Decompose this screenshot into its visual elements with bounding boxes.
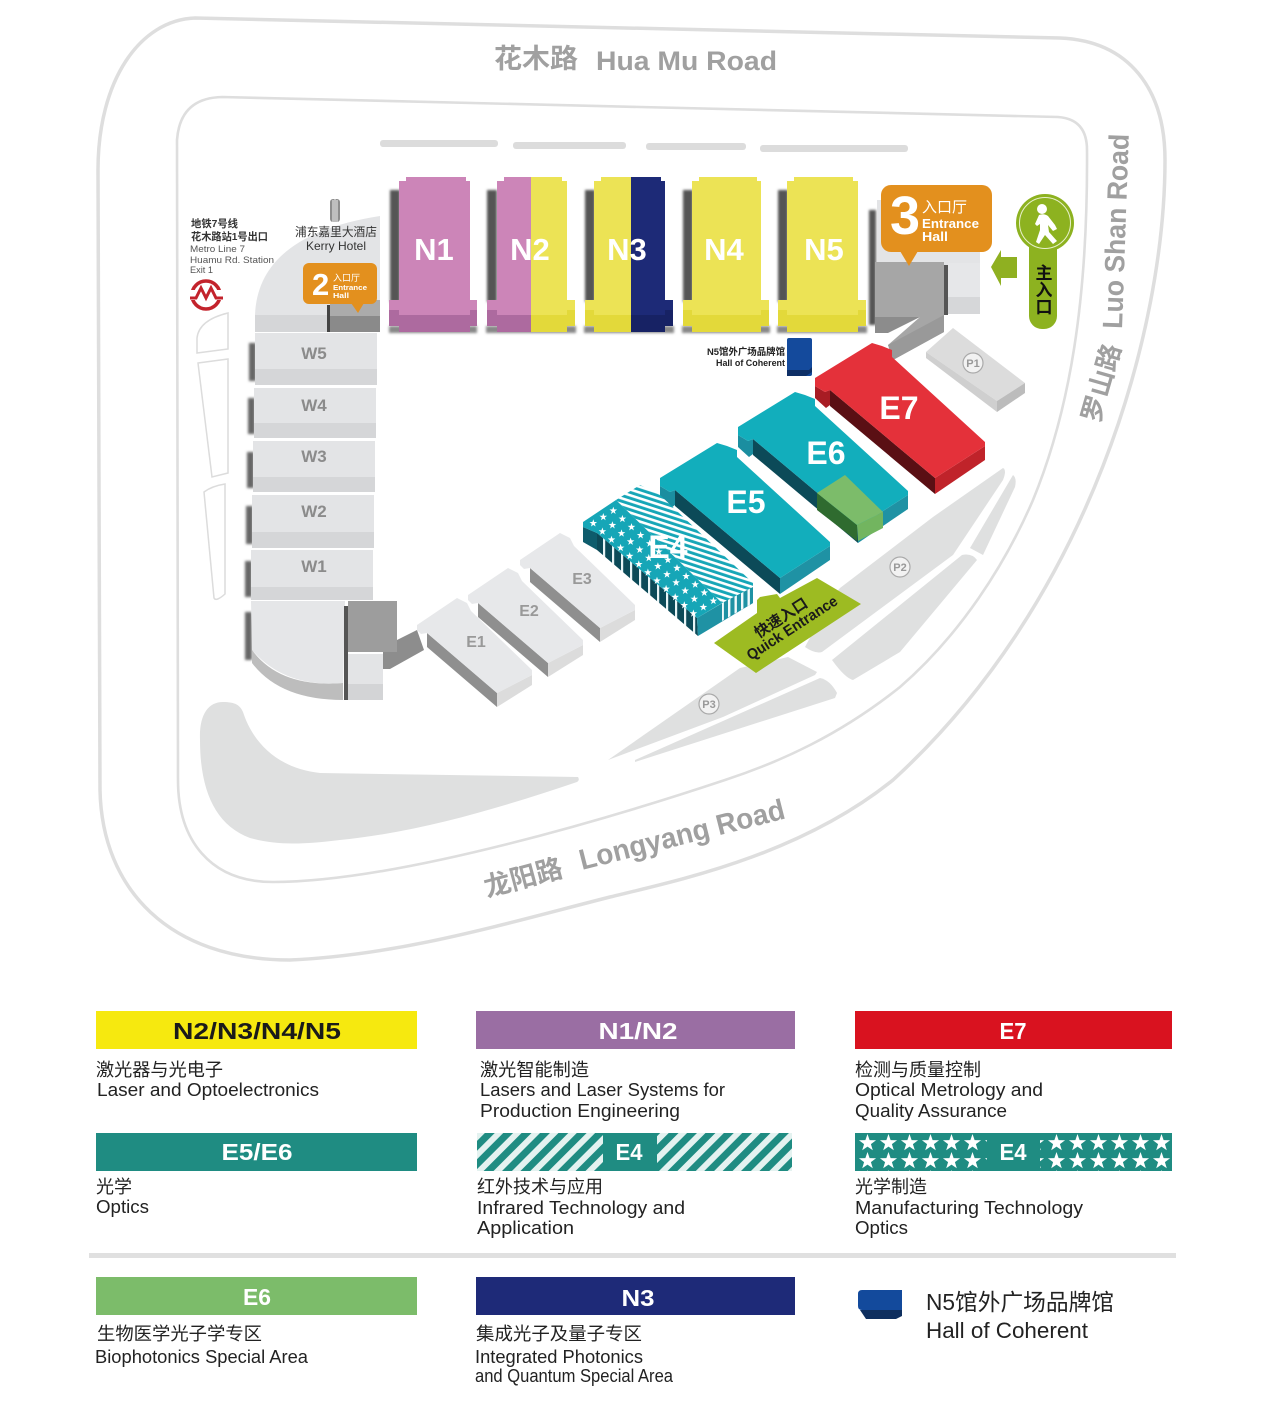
quick entrance sign: 快速入口 xyxy=(751,594,811,642)
legend: hall of Coherent: Hall of Coherent xyxy=(926,1318,1088,1343)
hall N4 xyxy=(682,177,770,333)
hall N2: N2 xyxy=(510,232,550,267)
legend: biophotonics: E6 xyxy=(243,1284,271,1310)
legend: integrated photonics: Integrated Photonics xyxy=(475,1347,643,1367)
road label: Longyang Road xyxy=(481,794,788,903)
hall E1: E1 xyxy=(466,634,486,651)
road label: Hua Mu Road: 花木路 xyxy=(494,44,578,74)
parking P1: P1 xyxy=(966,358,980,370)
legend: lasers and laser systems: Lasers and Laser Systems for xyxy=(480,1080,725,1100)
legend: hall of Coherent: N5馆外广场品牌馆 xyxy=(926,1289,1114,1315)
hall E7 xyxy=(815,343,985,494)
main entrance sign: 口 xyxy=(1036,298,1052,317)
north road dashes xyxy=(380,140,908,152)
Kerry hotel label: 浦东嘉里大酒店 xyxy=(295,225,377,239)
entrance hall 3 marker xyxy=(881,185,992,266)
hall W5 xyxy=(249,333,377,385)
hall W1 xyxy=(245,550,373,600)
arrow: main entrance direction xyxy=(991,250,1017,286)
legend: optics: E5/E6 xyxy=(222,1139,292,1165)
hall E7: E7 xyxy=(879,390,919,426)
legend: lasers and laser systems: N1/N2 xyxy=(598,1018,678,1044)
hall E6 xyxy=(738,392,908,543)
legend xyxy=(89,1011,1176,1386)
metro station text: Metro Line 7 xyxy=(190,244,245,255)
legend: lasers and laser systems: Production Engineering xyxy=(480,1101,680,1121)
hall W3 xyxy=(247,441,375,492)
legend: integrated photonics: 集成光子及量子专区 xyxy=(476,1324,642,1344)
legend: infrared technology: 红外技术与应用 xyxy=(477,1177,603,1197)
quick entrance sign xyxy=(714,578,861,673)
hall W1: W1 xyxy=(301,557,327,576)
legend: lasers and laser systems: 激光智能制造 xyxy=(480,1060,589,1080)
hall E2 xyxy=(468,568,583,677)
icon: metro logo xyxy=(190,281,223,309)
west entrance building xyxy=(255,216,380,332)
hall N4: N4 xyxy=(704,232,745,267)
legend: optics: 光学 xyxy=(96,1177,132,1197)
legend: manufacturing technology optics: Optics xyxy=(855,1218,908,1238)
legend: manufacturing technology optics: 光学制造 xyxy=(855,1177,927,1197)
legend: manufacturing technology optics: Manufacturing Technology xyxy=(855,1198,1083,1218)
icon: pedestrian xyxy=(1035,204,1057,244)
quick entrance sign: Quick Entrance xyxy=(744,593,841,664)
main entrance sign xyxy=(1016,194,1074,329)
hall E4 xyxy=(583,485,753,636)
road label: Luo Shan Road Chinese: 罗山路 xyxy=(1076,340,1127,426)
hall N2 xyxy=(486,177,576,333)
legend: lasers and laser systems xyxy=(476,1011,795,1121)
entrance hall 2 marker: Entrance xyxy=(333,283,367,292)
hall E3: E3 xyxy=(572,571,592,588)
entrance hall 3 marker: Hall xyxy=(922,229,948,244)
entrance hall 2 marker: 入口厅 xyxy=(333,273,360,283)
parking P2 label xyxy=(890,557,910,577)
hall E1 xyxy=(417,598,532,707)
E4 stars zone xyxy=(583,500,722,618)
hall E6: E6 xyxy=(806,435,846,471)
hall E4: E4 xyxy=(648,529,688,565)
legend: infrared technology: Application xyxy=(477,1218,574,1238)
hall N5 xyxy=(777,177,867,333)
legend: optical metrology: Quality Assurance xyxy=(855,1101,1007,1121)
legend: laser and optoelectronics xyxy=(96,1011,417,1100)
east entrance building xyxy=(869,200,980,360)
legend: laser and optoelectronics: N2/N3/N4/N5 xyxy=(173,1018,341,1044)
hall E3 xyxy=(520,533,635,642)
metro station text: 花木路站1号出口 xyxy=(191,230,268,243)
road label: Luo Shan Road: Luo Shan Road xyxy=(1097,133,1135,329)
entrance hall 3 marker: 入口厅 xyxy=(922,199,967,216)
legend: manufacturing technology optics xyxy=(855,1133,1172,1238)
hall W2 xyxy=(246,495,374,548)
hall W4: W4 xyxy=(301,396,327,415)
legend: infrared technology xyxy=(477,1133,792,1238)
hall W2: W2 xyxy=(301,502,327,521)
brand hall label: Hall of Coherent xyxy=(716,358,786,369)
hall N1: N1 xyxy=(414,232,454,267)
Kerry hotel tower xyxy=(330,199,340,222)
main entrance sign: 入 xyxy=(1036,281,1052,300)
hall N3: N3 xyxy=(607,232,647,267)
Biophotonics special area xyxy=(817,475,883,541)
E4 infrared stripes xyxy=(616,485,753,603)
hall W4 xyxy=(248,388,376,438)
hall N1 xyxy=(389,177,477,333)
metro station text xyxy=(190,217,274,276)
metro footpath outlines xyxy=(197,313,228,599)
legend: optical metrology: E7 xyxy=(1000,1018,1026,1044)
legend: optical metrology: Optical Metrology and xyxy=(855,1080,1043,1100)
west lobby building xyxy=(245,601,424,700)
legend: optics xyxy=(96,1133,417,1217)
road label: Longyang Road: 龙阳路 xyxy=(481,853,566,903)
legend: infrared technology: E4 xyxy=(616,1139,643,1165)
inner road outline xyxy=(177,97,1087,882)
parking and green areas xyxy=(200,468,1016,844)
metro station text: Exit 1 xyxy=(190,265,213,276)
Kerry hotel label xyxy=(295,225,377,253)
entrance hall 2 marker xyxy=(303,263,377,313)
hall E2: E2 xyxy=(519,603,539,620)
legend: biophotonics: Biophotonics Special Area xyxy=(95,1347,309,1367)
hall W5: W5 xyxy=(301,344,327,363)
entrance hall 2 marker: 2 xyxy=(312,267,329,302)
legend: integrated photonics: and Quantum Special Area xyxy=(475,1366,674,1386)
entrance hall 2 marker: Hall xyxy=(333,291,349,300)
road label: Longyang Road: Longyang Road xyxy=(576,794,788,877)
legend: integrated photonics: N3 xyxy=(622,1285,654,1311)
entrance hall 3 marker: 3 xyxy=(890,186,920,246)
legend: optical metrology: 检测与质量控制 xyxy=(855,1060,981,1080)
Kerry hotel label: Kerry Hotel xyxy=(306,239,366,253)
legend: biophotonics: 生物医学光子学专区 xyxy=(97,1324,262,1344)
hall N5: N5 xyxy=(804,232,844,267)
road label: Hua Mu Road xyxy=(494,44,777,76)
hall W3: W3 xyxy=(301,447,327,466)
hall E5: E5 xyxy=(726,484,766,520)
outer road outline xyxy=(98,18,1165,960)
legend: optics: Optics xyxy=(96,1197,149,1217)
legend: laser and optoelectronics: 激光器与光电子 xyxy=(96,1060,223,1080)
brand hall label xyxy=(707,346,786,369)
hall E5 xyxy=(660,443,830,594)
hall N3 xyxy=(584,177,674,333)
parking P2 label: P2 xyxy=(893,562,907,574)
entrance hall 3 marker: Entrance xyxy=(922,216,979,231)
legend: optical metrology xyxy=(855,1011,1172,1121)
parking P3 label xyxy=(699,694,719,714)
legend: biophotonics xyxy=(95,1277,417,1367)
legend: manufacturing technology optics: E4 xyxy=(1000,1139,1027,1165)
legend: hall of Coherent xyxy=(858,1289,1114,1343)
metro station text: Huamu Rd. Station xyxy=(190,255,274,266)
metro station text: 地铁7号线 xyxy=(191,217,238,230)
brand hall label: N5馆外广场品牌馆 xyxy=(707,346,785,358)
site map xyxy=(98,18,1165,960)
legend: laser and optoelectronics: Laser and Optoelectronics xyxy=(97,1080,319,1100)
legend: integrated photonics xyxy=(475,1277,795,1386)
parking P1 xyxy=(926,328,1025,412)
road label: Hua Mu Road: Hua Mu Road xyxy=(596,46,777,76)
brand hall of Coherent xyxy=(787,338,812,376)
parking P3 label: P3 xyxy=(702,699,716,711)
legend: infrared technology: Infrared Technology and xyxy=(477,1198,685,1218)
main entrance sign: 主 xyxy=(1036,264,1052,283)
